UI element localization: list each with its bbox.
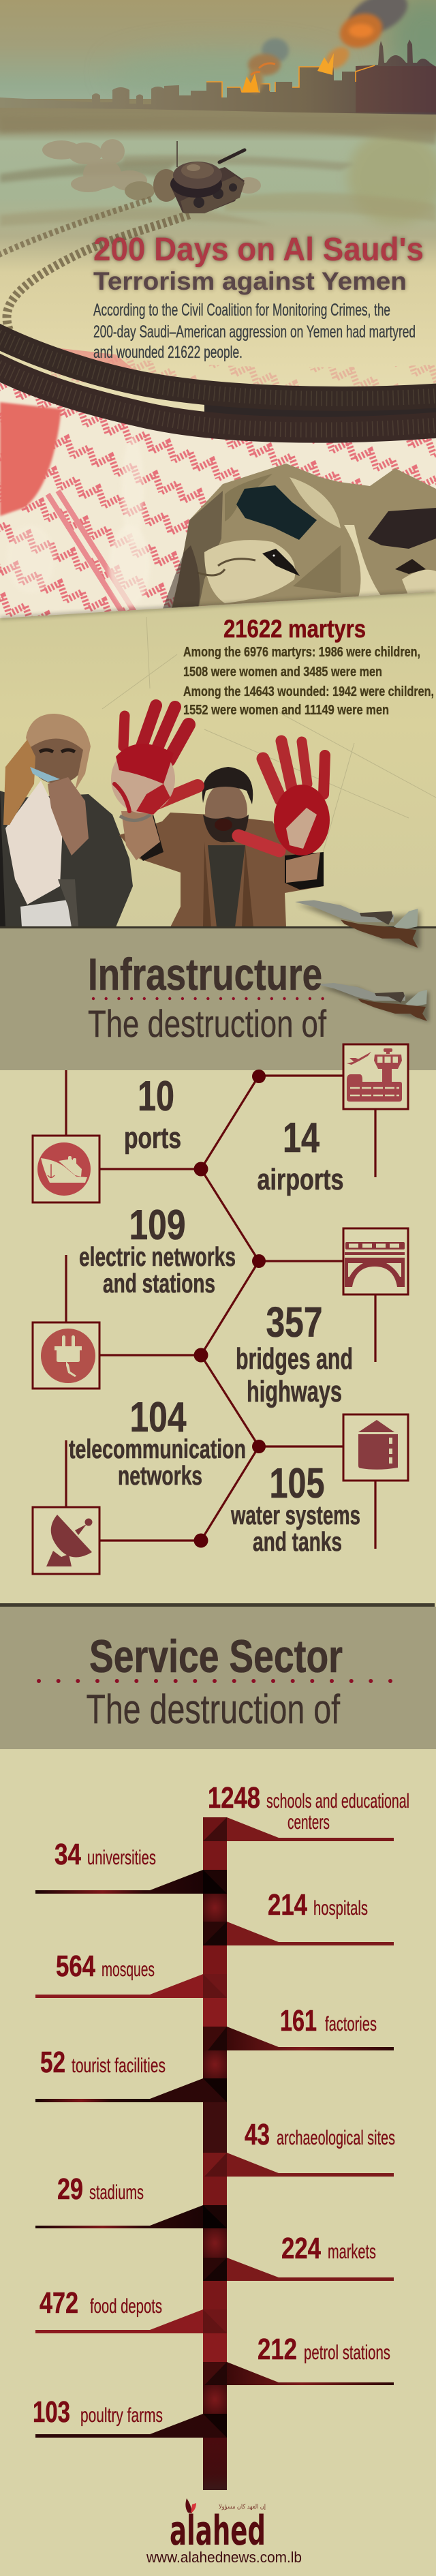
agal rope [0, 334, 436, 434]
branch: poultry farms: 103 [33, 2395, 70, 2429]
martyrs heading: 21622 martyrs [223, 615, 366, 643]
stat: 14 airports: airports [258, 1163, 343, 1196]
branch: schools [203, 1781, 409, 1841]
branch: petrol stations: petrol stations [304, 2342, 390, 2364]
left bloody hand [111, 706, 198, 815]
top border line [0, 926, 436, 928]
intro paragraph [93, 301, 416, 362]
martyrs breakdown [183, 645, 434, 718]
logo: alahed: alahed [170, 2507, 266, 2555]
stat: 104 telecommunication networks [69, 1394, 246, 1491]
branch: universities: universities [87, 1847, 156, 1869]
stat: 105 water systems: water systems [230, 1501, 360, 1530]
intro paragraph: and wounded 21622 people. [93, 343, 243, 362]
stat: 14 airports [258, 1115, 343, 1196]
stat: 357 bridges and highways [236, 1299, 353, 1408]
branch: petrol stations [203, 2333, 394, 2385]
stat: 357 bridges and highways: 357 [266, 1299, 323, 1346]
stat: 10 ports [124, 1073, 181, 1155]
branch: tourist facilities [35, 2046, 227, 2102]
title line 2: Terrorism against Yemen [93, 267, 407, 295]
stat: 10 ports: 10 [138, 1073, 174, 1120]
connector nodes [193, 1070, 266, 1547]
branch: schools: 1248 [208, 1781, 260, 1815]
stat: 14 airports: 14 [283, 1115, 320, 1162]
website url: www.alahednews.com.lb [146, 2549, 302, 2566]
branch: tourist facilities: tourist facilities [72, 2055, 166, 2077]
branch: tourist facilities: 52 [40, 2046, 65, 2079]
stat: 109 electric networks [79, 1202, 236, 1299]
icon: ship [33, 1136, 99, 1202]
title line 2: Terrorism against Yemen [93, 267, 407, 295]
section band: service sector [0, 1607, 436, 1749]
heading: service sector [37, 1631, 392, 1732]
branch: hospitals [203, 1888, 394, 1945]
branch: universities: 34 [54, 1838, 81, 1871]
branch: mosques: mosques [102, 1958, 155, 1981]
hero bottom edge shadow [0, 592, 436, 618]
city skyline [0, 40, 436, 115]
logo: alahed [170, 2498, 266, 2555]
branch: stadiums: stadiums [89, 2181, 144, 2204]
stat: 104 telecommunication networks: networks [118, 1461, 202, 1491]
martyrs breakdown: 1508 were women and 3485 were men [183, 665, 382, 680]
branch: mosques: 564 [56, 1950, 95, 1983]
branch: poultry farms: poultry farms [80, 2404, 163, 2427]
stat: 357 bridges and highways: bridges and [236, 1342, 353, 1376]
stat: 105 water systems [230, 1460, 360, 1557]
martyrs breakdown: 1552 were women and 11149 were men [183, 703, 389, 718]
branch: markets: 224 [281, 2232, 321, 2265]
icon: satellite dish [33, 1507, 99, 1574]
heading: infrastructure: Infrastructure [88, 949, 322, 999]
right bloody hand [238, 741, 330, 855]
icon: water tank [343, 1414, 408, 1481]
icon: bridge [343, 1228, 408, 1294]
branch: schools: centers [287, 1811, 330, 1834]
branch: archaeological sites [203, 2118, 395, 2177]
jet upper [295, 900, 420, 949]
branch: mosques [35, 1950, 227, 1998]
tank exhaust smoke [42, 139, 261, 200]
dotted divider [37, 1679, 392, 1683]
logo: alahed: إن العهد كان مسؤولا [219, 2503, 266, 2511]
branch: markets: markets [328, 2241, 376, 2263]
stat: 10 ports: ports [124, 1121, 181, 1155]
ground [0, 99, 436, 426]
branch: food depots: food depots [90, 2295, 162, 2318]
heading: infrastructure [88, 949, 326, 1045]
branch: universities [35, 1838, 227, 1894]
stat: 105 water systems: and tanks [253, 1528, 342, 1557]
branch: hospitals: hospitals [313, 1897, 368, 1920]
smoke and fire [242, 0, 414, 93]
infrastructure connector network [66, 1070, 375, 1549]
icon: airport [343, 1044, 408, 1109]
tank [153, 141, 245, 213]
keffiyeh [0, 344, 436, 627]
tank tread tracks [0, 199, 189, 344]
section band: infrastructure [0, 928, 436, 1070]
center man [119, 767, 324, 927]
stat: 109 electric networks: electric networks [79, 1243, 236, 1272]
stat: 104 telecommunication networks: telecommunication [69, 1435, 246, 1464]
stat: 109 electric networks: and stations [103, 1269, 215, 1299]
title block [93, 232, 424, 362]
title line 1: 200 Days on Al Saud's [93, 232, 424, 268]
timeline spine [203, 1817, 227, 2490]
jet lower [317, 983, 429, 1022]
branch: stadiums: 29 [57, 2172, 83, 2206]
parchment panel: martyrs [0, 586, 436, 928]
heading: infrastructure: The destruction of [88, 1002, 326, 1045]
heading: service sector: Service Sector [89, 1631, 343, 1682]
branch: petrol stations: 212 [258, 2333, 297, 2366]
branch: archaeological sites: 43 [245, 2118, 270, 2151]
stat: 105 water systems: 105 [270, 1460, 324, 1507]
section separator line [0, 1603, 435, 1607]
branch: markets [203, 2232, 394, 2281]
branch: food depots: 472 [40, 2286, 78, 2320]
branch: poultry farms [33, 2395, 227, 2438]
branch: stadiums [35, 2172, 227, 2228]
dotted divider [92, 997, 324, 1000]
heading: service sector: The destruction of [86, 1686, 340, 1732]
branch: factories: factories [325, 2013, 377, 2035]
caricature face [160, 464, 436, 620]
photo: people with bloody hands [0, 706, 330, 927]
branch: hospitals: 214 [268, 1888, 307, 1922]
branch: factories [203, 2004, 394, 2050]
title line 1: 200 Days on Al Saud's [93, 232, 424, 268]
stat: 104 telecommunication networks: 104 [129, 1394, 187, 1441]
left man [0, 714, 133, 927]
branch: factories: 161 [280, 2004, 317, 2037]
stat: 109 electric networks: 109 [129, 1202, 185, 1249]
icon: power plug [33, 1322, 99, 1389]
sky [0, 0, 436, 99]
panel: hero illustration [0, 0, 436, 627]
stat: 357 bridges and highways: highways [247, 1375, 342, 1408]
logo flower [185, 2498, 196, 2513]
branch: food depots [35, 2286, 227, 2333]
